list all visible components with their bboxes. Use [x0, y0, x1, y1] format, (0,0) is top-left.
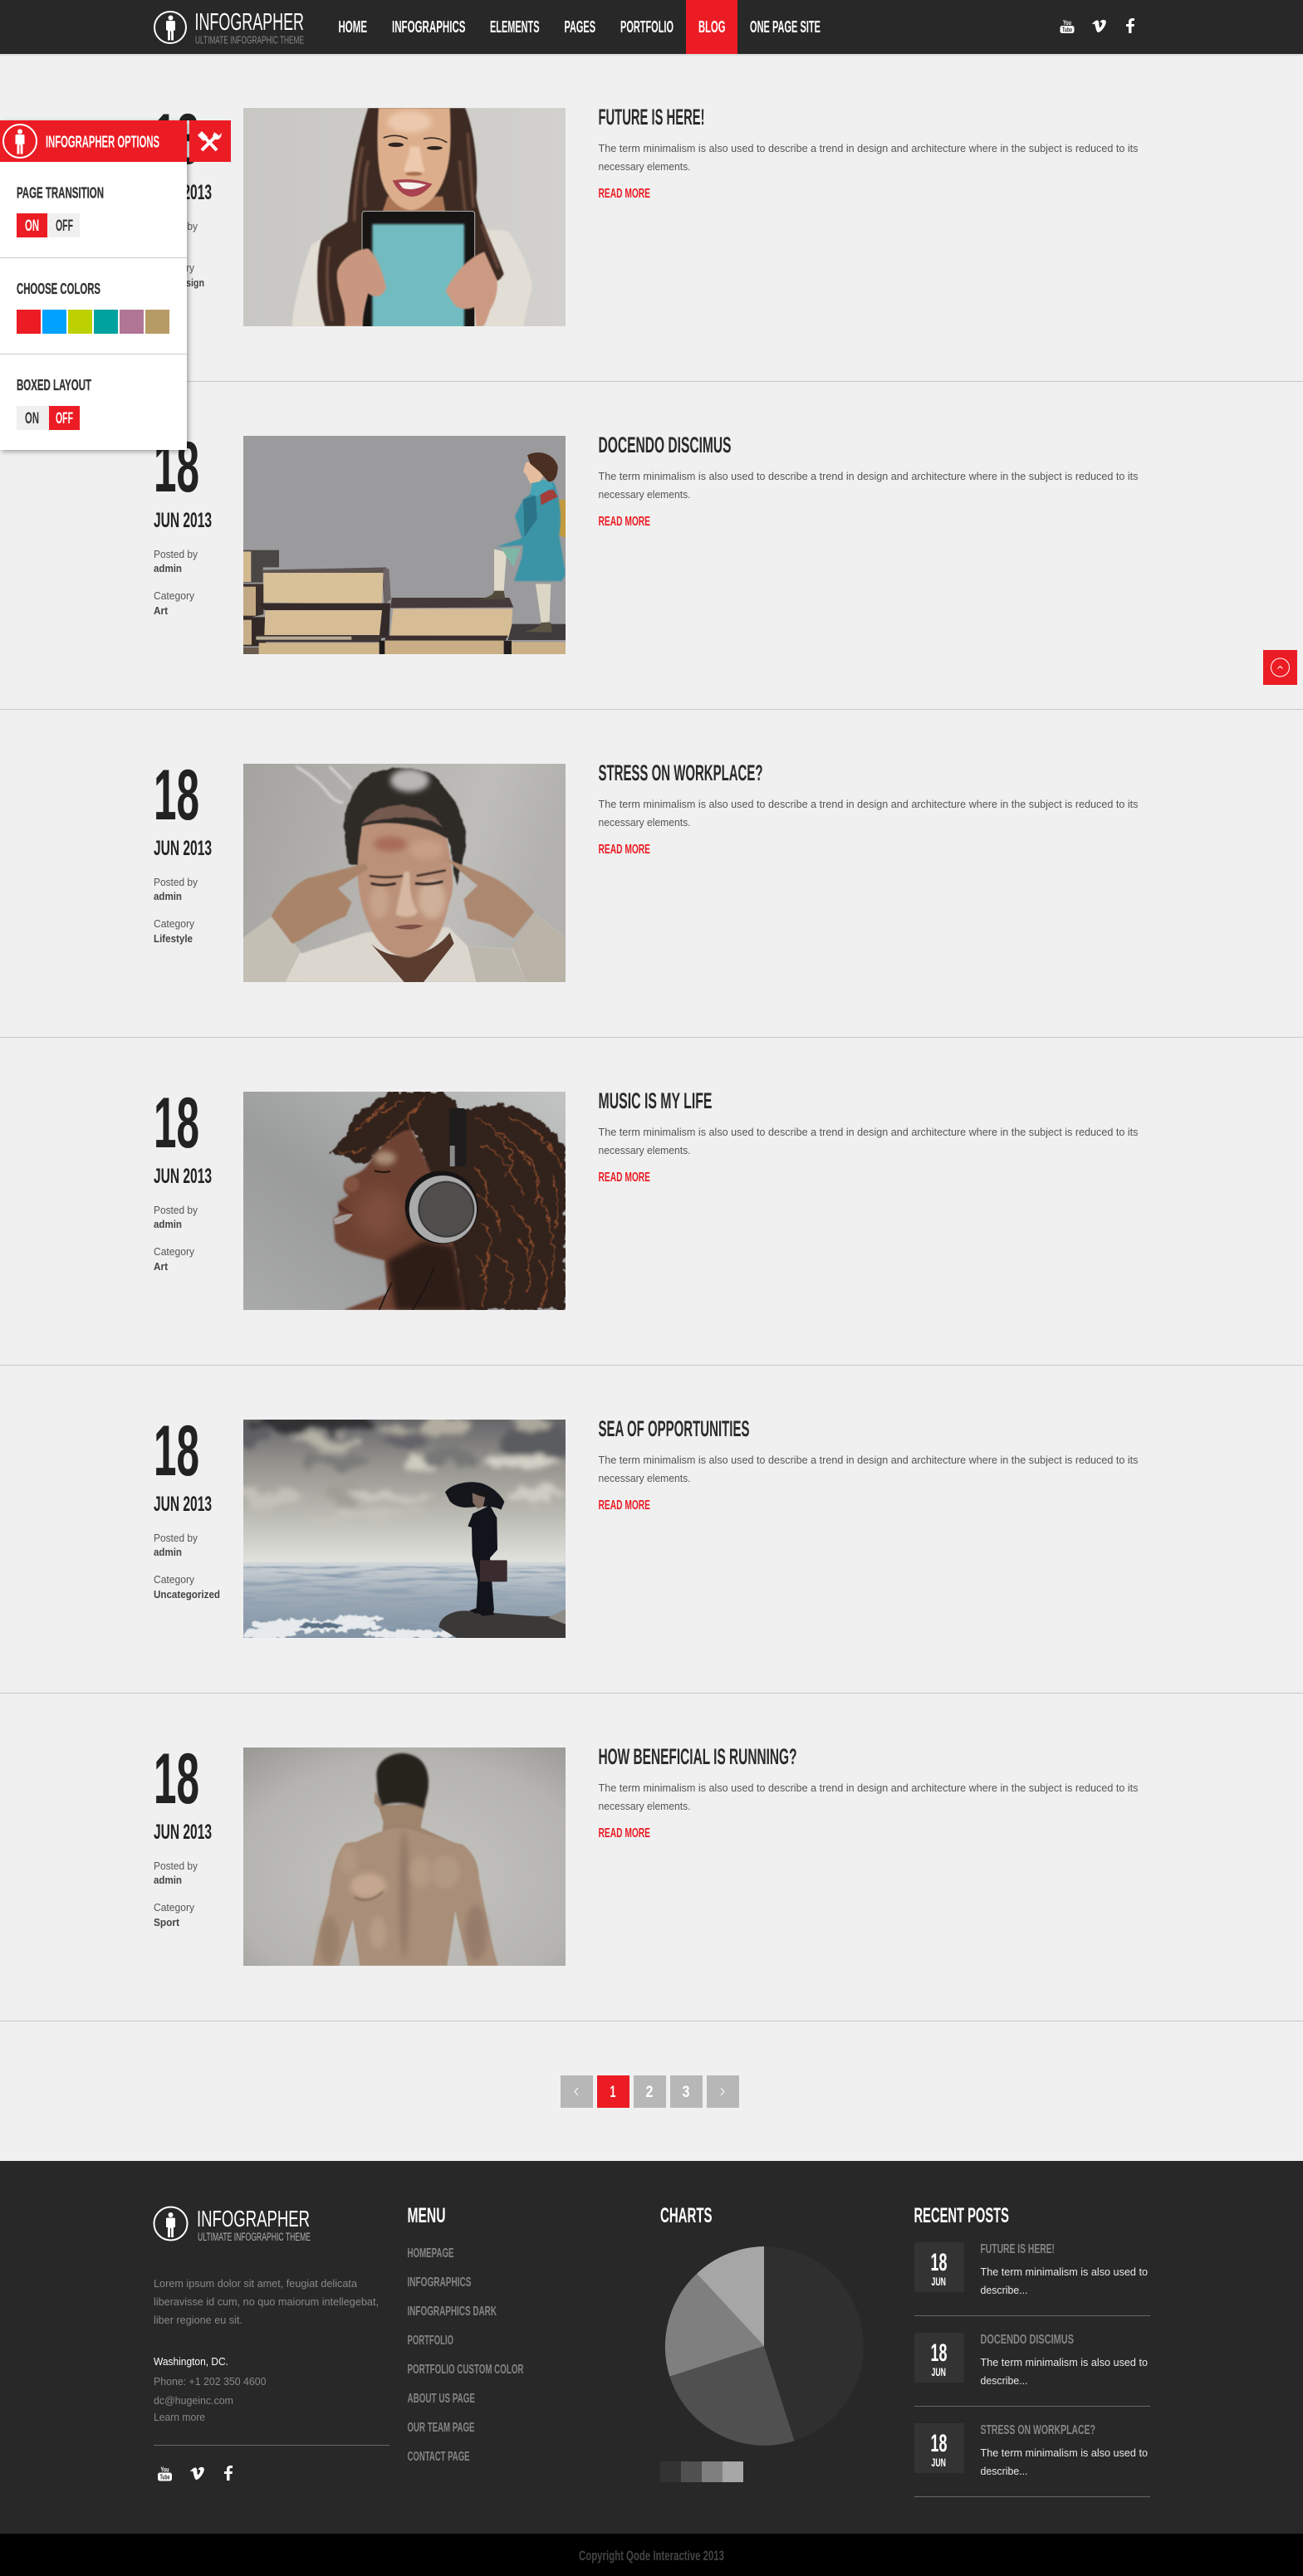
date block: JUN 2013 [154, 837, 212, 860]
recent post 2: JUN [932, 2365, 946, 2378]
date block: 18 [154, 1083, 199, 1163]
post excerpt [598, 1126, 1139, 1156]
post excerpt [598, 142, 1139, 173]
option: boxed layout: ON [25, 410, 39, 428]
recent post 1: The term minimalism is also used to [980, 2266, 1148, 2278]
options panel [0, 120, 231, 450]
date block: Category [154, 589, 194, 602]
options panel header: INFOGRAPHER OPTIONS [46, 133, 159, 151]
footer menu: PORTFOLIO CUSTOM COLOR [407, 2363, 523, 2377]
post title: MUSIC IS MY LIFE [598, 1088, 713, 1113]
date block: Posted by [154, 1860, 198, 1872]
options panel tab: tools icon [189, 120, 231, 162]
date block: Art [154, 604, 169, 617]
date block: Category [154, 1573, 194, 1586]
recent post 2 [914, 2333, 1148, 2387]
option: choose colors [17, 281, 169, 334]
photo: woman with headphones [243, 1092, 566, 1310]
post excerpt: necessary elements. [598, 1472, 691, 1484]
active nav highlight [686, 0, 737, 54]
footer contact: Washington, DC. [154, 2355, 228, 2368]
post title: HOW BENEFICIAL IS RUNNING? [598, 1744, 797, 1769]
recent post 1: describe... [980, 2284, 1028, 2296]
date block: JUN 2013 [154, 181, 212, 204]
footer about text: liber regione eu sit. [154, 2314, 242, 2326]
post title: SEA OF OPPORTUNITIES [598, 1416, 749, 1441]
recent post 2: DOCENDO DISCIMUS [980, 2333, 1074, 2347]
footer menu: ABOUT US PAGE [407, 2392, 475, 2406]
footer about text: liberavisse id cum, no quo maiorum intellegebat, [154, 2295, 379, 2308]
option: boxed layout: BOXED LAYOUT [17, 377, 91, 393]
date block: Art [154, 1260, 169, 1273]
date block: Posted by [154, 1532, 198, 1544]
main menu: PAGES [565, 18, 595, 37]
date block [154, 100, 212, 289]
post excerpt: necessary elements. [598, 488, 691, 501]
post 6: how beneficial is running [154, 1739, 1139, 1966]
main menu [339, 18, 820, 37]
date block: 18 [154, 755, 199, 835]
pagination: 2 [646, 2084, 653, 2101]
footer menu: CONTACT PAGE [407, 2450, 470, 2464]
date block: Category [154, 1901, 194, 1914]
recent posts: RECENT POSTS [914, 2204, 1009, 2227]
site logo: ULTIMATE INFOGRAPHIC THEME [195, 33, 304, 46]
option: boxed layout: OFF [56, 410, 73, 428]
recent post 3: STRESS ON WORKPLACE? [980, 2423, 1095, 2437]
recent post 2: describe... [980, 2374, 1028, 2387]
date block: Posted by [154, 548, 198, 560]
recent post 1 [914, 2242, 1148, 2296]
pie chart [665, 2246, 864, 2446]
read more link: READ MORE [598, 1171, 650, 1185]
recent post 2: The term minimalism is also used to [980, 2356, 1148, 2368]
date block: Posted by [154, 876, 198, 888]
post 4: music is my life [154, 1083, 1139, 1310]
recent post 3 [914, 2423, 1148, 2477]
footer menu: INFOGRAPHICS DARK [407, 2305, 497, 2319]
date block: admin [154, 234, 182, 247]
post excerpt: necessary elements. [598, 1144, 691, 1156]
option: page transition: ON [25, 218, 39, 235]
post 5: sea of opportunities [154, 1411, 1139, 1639]
post 1: future is here [154, 100, 1139, 335]
pagination: 1 [610, 2084, 616, 2101]
post excerpt: necessary elements. [598, 816, 691, 829]
footer contact: dc@hugeinc.com [154, 2394, 233, 2407]
date block: JUN 2013 [154, 1165, 212, 1188]
footer menu: INFOGRAPHICS [407, 2275, 472, 2290]
date block: Category [154, 1245, 194, 1258]
photo: girl climbing books [243, 436, 566, 654]
date block [154, 1083, 212, 1273]
header social icons: You [1063, 19, 1071, 27]
read more link: READ MORE [598, 1826, 650, 1840]
header social icons [1060, 18, 1134, 33]
post excerpt [598, 470, 1139, 501]
post excerpt [598, 798, 1139, 829]
date block: Sport [154, 1916, 180, 1928]
date block: admin [154, 1218, 182, 1230]
pagination: 3 [683, 2084, 689, 2101]
post 3: stress on workplace [154, 755, 1139, 982]
read more link: READ MORE [598, 843, 650, 857]
recent posts [914, 2204, 1150, 2497]
pagination [561, 2075, 739, 2108]
recent post 3: 18 [930, 2430, 947, 2457]
photo: woman holding tablet [243, 108, 566, 335]
date block [154, 428, 212, 617]
site logo [154, 9, 304, 46]
main menu: INFOGRAPHICS [392, 18, 465, 37]
date block [154, 755, 212, 945]
date block: JUN 2013 [154, 1493, 212, 1516]
photo: stressed man [243, 764, 566, 982]
footer menu [407, 2204, 523, 2464]
footer about text [154, 2277, 379, 2326]
post excerpt: necessary elements. [598, 1800, 691, 1812]
main menu: PORTFOLIO [620, 18, 674, 37]
recent post 2: 18 [930, 2339, 947, 2367]
footer menu: OUR TEAM PAGE [407, 2421, 475, 2435]
date block: JUN 2013 [154, 1821, 212, 1844]
date block: Category [154, 262, 194, 274]
date block: Uncategorized [154, 1588, 220, 1601]
date block: 18 [154, 1411, 199, 1491]
option: boxed layout [17, 377, 91, 430]
main menu: HOME [339, 18, 367, 37]
footer contact: Learn more [154, 2411, 205, 2423]
date block: 18 [154, 1739, 199, 1819]
recent post 3: describe... [980, 2465, 1028, 2477]
header social icons: Tube [1062, 27, 1072, 33]
footer social icons: Tube [159, 2474, 170, 2481]
copyright bar [0, 2534, 1303, 2576]
post excerpt: The term minimalism is also used to describe a trend in design and architecture where in the subject is reduced to its [598, 798, 1139, 810]
date block [154, 1739, 212, 1928]
read more link: READ MORE [598, 187, 650, 201]
post excerpt: The term minimalism is also used to describe a trend in design and architecture where in the subject is reduced to its [598, 1782, 1139, 1794]
post excerpt: The term minimalism is also used to describe a trend in design and architecture where in the subject is reduced to its [598, 1454, 1139, 1466]
date block: admin [154, 562, 182, 574]
charts heading: CHARTS [660, 2204, 713, 2227]
post excerpt: The term minimalism is also used to describe a trend in design and architecture where in the subject is reduced to its [598, 1126, 1139, 1138]
post excerpt [598, 1782, 1139, 1812]
post excerpt: necessary elements. [598, 160, 691, 173]
post excerpt [598, 1454, 1139, 1484]
site logo: INFOGRAPHER [194, 9, 304, 36]
footer logo: INFOGRAPHER [197, 2206, 310, 2231]
option: page transition: OFF [56, 218, 73, 235]
date block: Posted by [154, 220, 198, 232]
footer menu: HOMEPAGE [407, 2246, 453, 2261]
post title: FUTURE IS HERE! [598, 105, 704, 130]
option: page transition: PAGE TRANSITION [17, 184, 104, 201]
date block: JUN 2013 [154, 509, 212, 532]
recent post 1: 18 [930, 2249, 947, 2276]
photo: man's muscular back [243, 1747, 566, 1966]
read more link: READ MORE [598, 1498, 650, 1513]
main menu: BLOG [698, 18, 726, 37]
footer [0, 2161, 1303, 2534]
date block [154, 1411, 220, 1601]
option: choose colors: CHOOSE COLORS [17, 281, 100, 297]
main menu: ONE PAGE SITE [750, 18, 820, 37]
chart legend [660, 2461, 743, 2482]
date block: Posted by [154, 1204, 198, 1216]
date block: Lifestyle [154, 932, 193, 945]
top navigation bar [0, 0, 1303, 56]
recent post 1: FUTURE IS HERE! [980, 2242, 1055, 2256]
recent post 3: JUN [932, 2456, 946, 2469]
date block: admin [154, 1874, 182, 1886]
post title: DOCENDO DISCIMUS [598, 433, 731, 457]
main menu: ELEMENTS [490, 18, 540, 37]
footer about text: Lorem ipsum dolor sit amet, feugiat delicata [154, 2277, 358, 2290]
date block: Category [154, 917, 194, 930]
footer menu: PORTFOLIO [407, 2334, 453, 2348]
post excerpt: The term minimalism is also used to describe a trend in design and architecture where in the subject is reduced to its [598, 142, 1139, 154]
recent post 3: The term minimalism is also used to [980, 2446, 1148, 2459]
date block: Web Design [154, 276, 204, 289]
post excerpt: The term minimalism is also used to describe a trend in design and architecture where in the subject is reduced to its [598, 470, 1139, 482]
footer menu: MENU [407, 2204, 445, 2227]
scroll to top button [1263, 650, 1297, 685]
recent post 1: JUN [932, 2275, 946, 2288]
post title: STRESS ON WORKPLACE? [598, 760, 762, 785]
date block: 18 [154, 100, 199, 179]
options panel header [0, 120, 187, 162]
date block: admin [154, 1546, 182, 1558]
footer social icons [158, 2466, 233, 2481]
footer logo [154, 2206, 311, 2243]
footer contact: Phone: +1 202 350 4600 [154, 2375, 266, 2388]
post 2: docendo discimus [154, 428, 1139, 654]
photo: businessman on rock at sea [233, 1411, 573, 1639]
option: page transition [17, 184, 104, 237]
date block: admin [154, 890, 182, 902]
date block: 18 [154, 428, 199, 507]
read more link: READ MORE [598, 515, 650, 529]
footer social icons: You [161, 2466, 169, 2474]
footer logo: ULTIMATE INFOGRAPHIC THEME [198, 2231, 311, 2243]
footer contact [154, 2355, 266, 2423]
copyright bar: Copyright Qode Interactive 2013 [579, 2548, 724, 2564]
